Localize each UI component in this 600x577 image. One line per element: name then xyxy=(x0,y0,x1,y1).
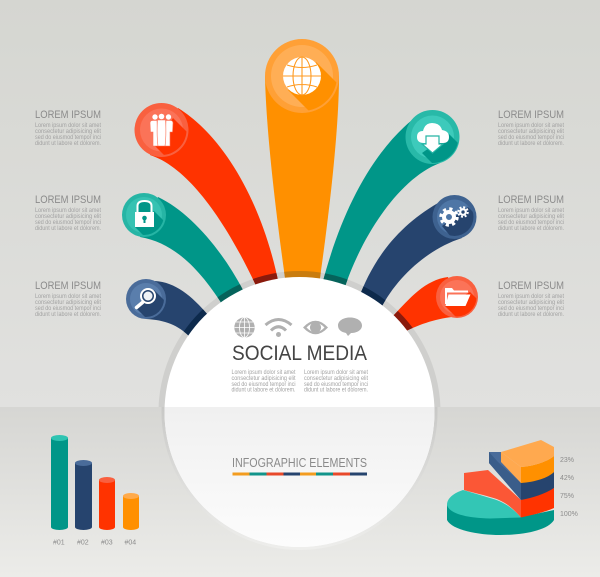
text: center column 2: consectetur adipisicing elit xyxy=(304,376,368,382)
icon: magnifier xyxy=(136,289,155,308)
band: teal right xyxy=(322,120,440,290)
white circle xyxy=(164,277,434,547)
text block: right 1: didunt ut labore et dolorem. xyxy=(498,141,564,147)
band: teal left xyxy=(140,197,243,304)
node: magnifier navy xyxy=(126,279,166,319)
text block: left 3: Lorem ipsum dolor sit amet xyxy=(35,294,101,300)
icon: globe xyxy=(283,57,321,95)
node: people red xyxy=(134,103,188,157)
text block: right 2: LOREM IPSUM xyxy=(498,194,564,206)
band: red left xyxy=(150,108,279,290)
text: center column 1: consectetur adipisicing elit xyxy=(232,376,296,382)
text block: right 1: consectetur adipisicing elit xyxy=(498,129,564,135)
bar 03 xyxy=(99,477,115,530)
icon: eye xyxy=(303,321,328,334)
text: center column 1 xyxy=(232,370,296,394)
pie labels: 100% xyxy=(560,511,578,518)
bar labels: #03 xyxy=(101,540,113,546)
text block: right 1 xyxy=(498,109,564,147)
red slice xyxy=(464,470,554,518)
text block: left 1: Lorem ipsum dolor sit amet xyxy=(35,123,101,129)
base slice xyxy=(447,490,554,535)
text block: left 3: sed do eiusmod tempor inci xyxy=(35,306,101,312)
icon: folder xyxy=(445,288,470,306)
text block: right 2: consectetur adipisicing elit xyxy=(498,214,564,220)
striped underline xyxy=(232,472,367,476)
text block: left 1 xyxy=(35,109,101,147)
text block: left 1: consectetur adipisicing elit xyxy=(35,129,101,135)
node: folder red xyxy=(436,276,478,318)
text: center column 2: sed do eiusmod tempor inci xyxy=(304,382,368,388)
node: gears navy xyxy=(432,195,476,239)
text block: left 1: LOREM IPSUM xyxy=(35,109,101,121)
icon: speech bubble xyxy=(338,318,362,336)
pie labels xyxy=(560,457,578,518)
text block: left 2: consectetur adipisicing elit xyxy=(35,214,101,220)
icon row: social icons xyxy=(234,317,362,338)
text block: right 3: Lorem ipsum dolor sit amet xyxy=(498,294,564,300)
text block: left 2 xyxy=(35,194,101,232)
icon: gears xyxy=(441,207,468,225)
text: center column 2 xyxy=(304,370,368,394)
text block: left 2: sed do eiusmod tempor inci xyxy=(35,220,101,226)
text block: right 1: LOREM IPSUM xyxy=(498,109,564,121)
icon: cloud download xyxy=(417,123,449,153)
text block: right 3: sed do eiusmod tempor inci xyxy=(498,306,564,312)
icon: wifi xyxy=(266,320,292,337)
text block: left 2: Lorem ipsum dolor sit amet xyxy=(35,208,101,214)
stacked pie chart xyxy=(447,440,578,535)
bar labels: #02 xyxy=(77,540,89,546)
navy slice xyxy=(489,452,554,500)
bar 04 xyxy=(123,493,139,530)
orange slice xyxy=(501,440,554,483)
text block: left 1: sed do eiusmod tempor inci xyxy=(35,135,101,141)
bar labels: #01 xyxy=(53,540,65,546)
text block: right 2 xyxy=(498,194,564,232)
node: cloud teal xyxy=(406,110,460,164)
text block: right 2: Lorem ipsum dolor sit amet xyxy=(498,208,564,214)
pie labels: 42% xyxy=(560,475,574,482)
text: center column 2: didunt ut labore et dolorem. xyxy=(304,388,368,394)
bar labels xyxy=(53,540,136,546)
text: center column 1: Lorem ipsum dolor sit amet xyxy=(232,370,296,376)
bar chart xyxy=(51,435,139,546)
text block: right 2: sed do eiusmod tempor inci xyxy=(498,220,564,226)
node: globe orange xyxy=(265,39,339,113)
node: lock teal xyxy=(122,193,166,237)
text block: left 2: didunt ut labore et dolorem. xyxy=(35,226,101,232)
band: navy left xyxy=(146,281,208,337)
band: orange xyxy=(265,76,339,285)
text block: left 2: LOREM IPSUM xyxy=(35,194,101,206)
icon: people xyxy=(150,113,173,146)
text block: left 3: LOREM IPSUM xyxy=(35,280,101,292)
bar 01 xyxy=(51,435,68,530)
text block: left 1: didunt ut labore et dolorem. xyxy=(35,141,101,147)
band: red right xyxy=(393,277,460,331)
icon: lock xyxy=(135,201,154,227)
pie labels: 23% xyxy=(560,457,574,464)
text block: right 3: LOREM IPSUM xyxy=(498,280,564,292)
text: center column 1: didunt ut labore et dolorem. xyxy=(232,388,296,394)
text block: right 1: Lorem ipsum dolor sit amet xyxy=(498,123,564,129)
text block: left 3: didunt ut labore et dolorem. xyxy=(35,312,101,318)
text block: left 3 xyxy=(35,280,101,318)
text block: right 3: consectetur adipisicing elit xyxy=(498,300,564,306)
text: center column 2: Lorem ipsum dolor sit amet xyxy=(304,370,368,376)
heading: social media: SOCIAL MEDIA xyxy=(232,342,367,365)
heading: infographic elements: INFOGRAPHIC ELEMENTS xyxy=(232,456,367,470)
bar 02 xyxy=(75,460,92,530)
text block: right 2: didunt ut labore et dolorem. xyxy=(498,226,564,232)
band: navy right xyxy=(358,203,462,310)
text block: left 3: consectetur adipisicing elit xyxy=(35,300,101,306)
text: center column 1: sed do eiusmod tempor inci xyxy=(232,382,296,388)
text block: right 1: sed do eiusmod tempor inci xyxy=(498,135,564,141)
text block: right 3 xyxy=(498,280,564,318)
icon: grey globe xyxy=(234,317,255,338)
text block: right 3: didunt ut labore et dolorem. xyxy=(498,312,564,318)
bar labels: #04 xyxy=(124,540,136,546)
pie labels: 75% xyxy=(560,493,574,500)
